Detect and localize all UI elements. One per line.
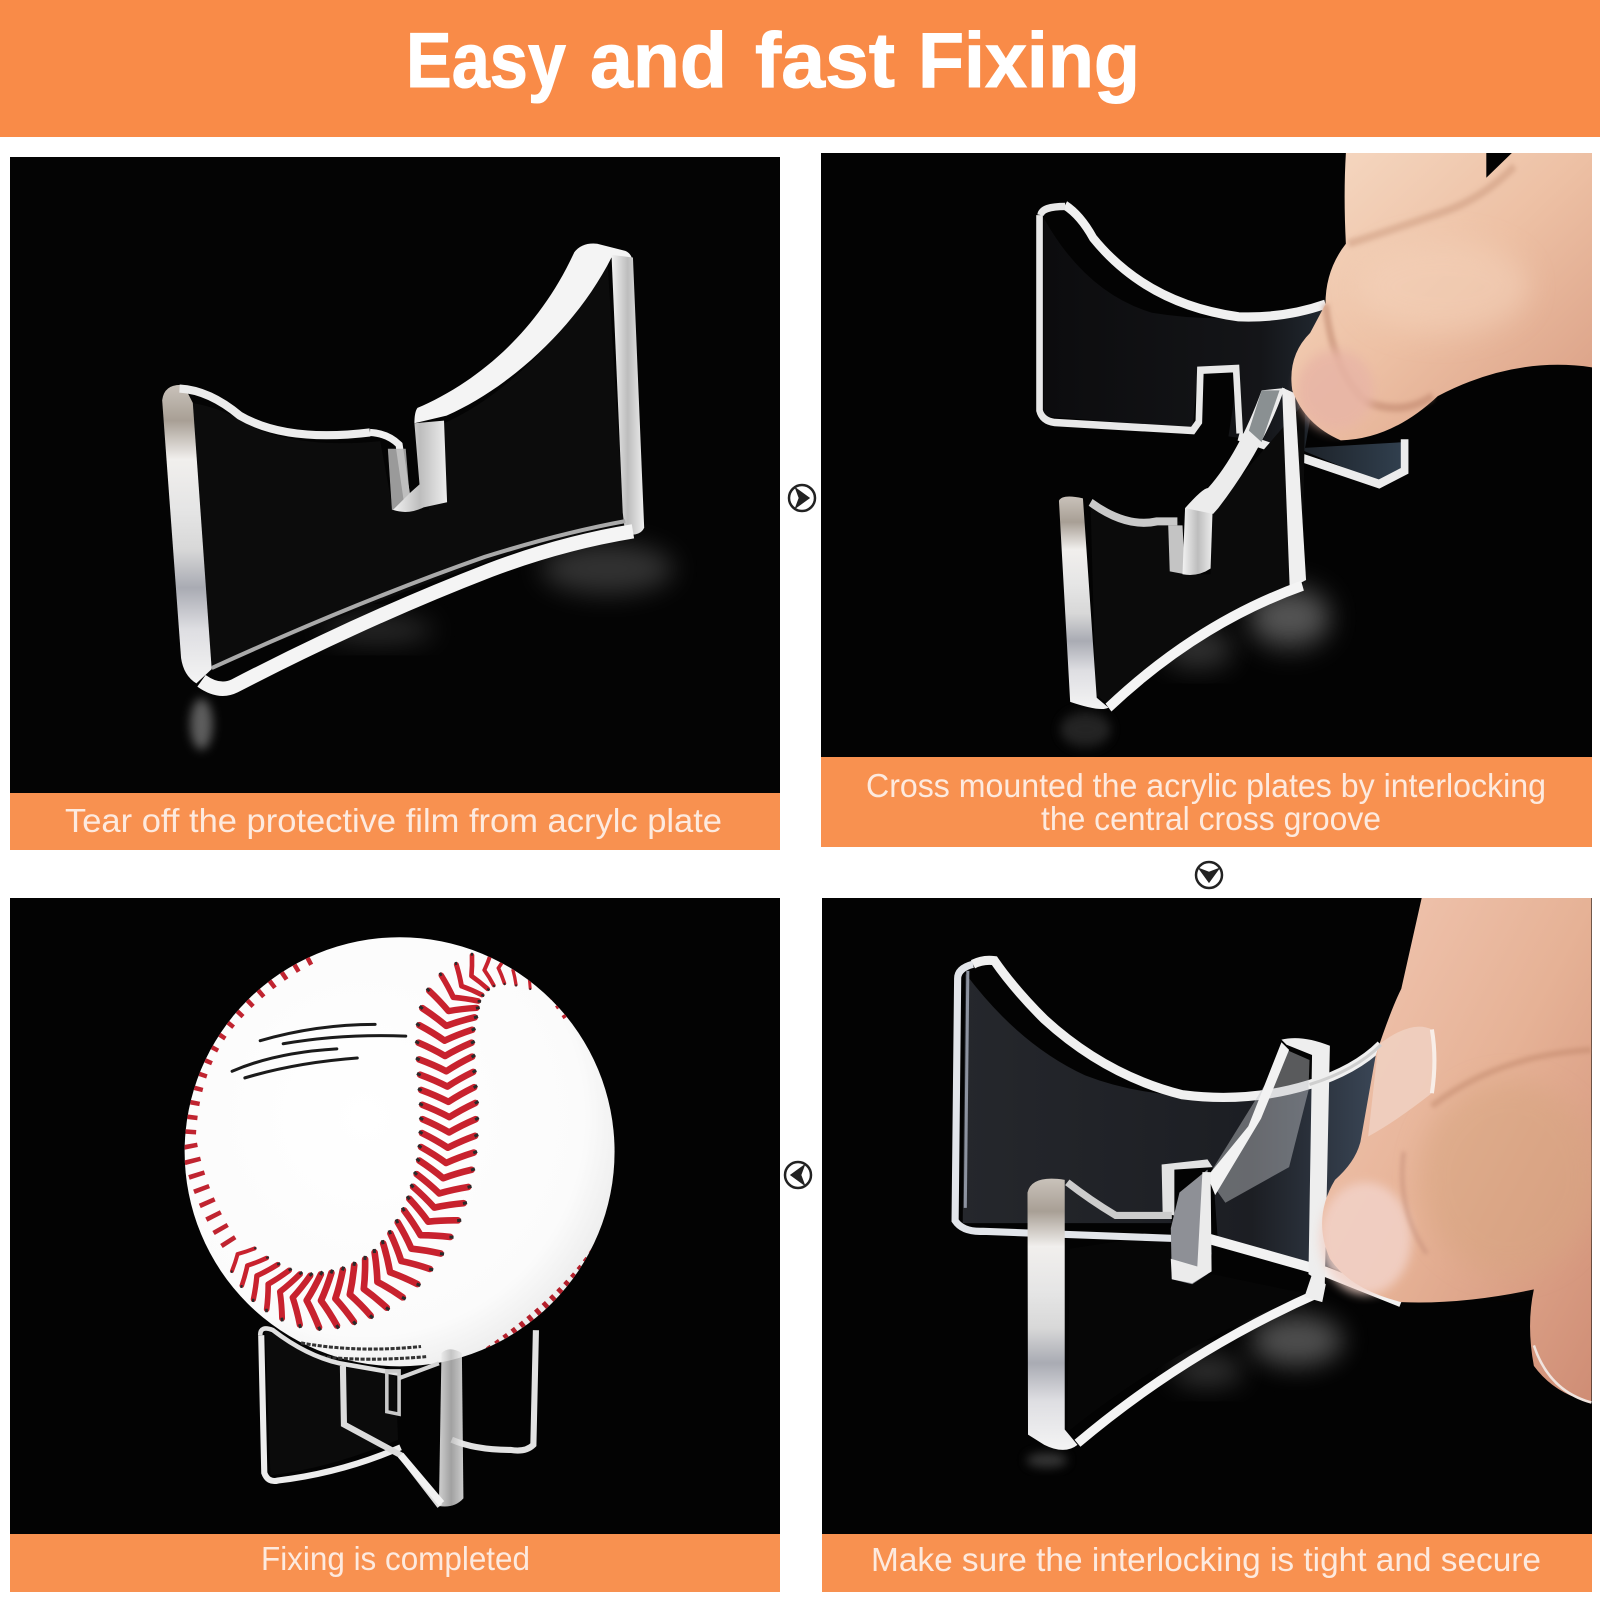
ball logo strokes xyxy=(232,1024,406,1078)
photo: two plates held by hand xyxy=(821,153,1592,757)
caption: step 1 xyxy=(10,793,780,850)
arrow: step 2 to step 3 xyxy=(1196,862,1222,888)
caption: step 2: Cross mounted the acrylic plates by interlocking xyxy=(866,767,1546,804)
acrylic stand xyxy=(260,1328,536,1506)
panel: step 2 cross mount xyxy=(821,153,1592,847)
arrow: step 1 to step 2 xyxy=(789,485,815,511)
title xyxy=(406,16,1140,104)
title: Easy xyxy=(406,16,566,104)
panel: step 1 tear off film xyxy=(10,157,780,850)
photo: interlocked plates close-up xyxy=(822,898,1592,1534)
panel: step 4 fixing completed xyxy=(10,898,780,1592)
photo: baseball on stand xyxy=(10,898,780,1534)
caption: step 1: Tear off the protective film from acrylc plate xyxy=(65,802,722,839)
caption: step 3: Make sure the interlocking is tight and secure xyxy=(871,1541,1541,1578)
ball printed text xyxy=(301,1343,426,1359)
hand xyxy=(1291,153,1592,440)
caption: step 3 xyxy=(822,1534,1592,1592)
title: Fixing xyxy=(918,16,1140,104)
hand xyxy=(1320,898,1598,1403)
caption: step 2: the central cross groove xyxy=(1041,800,1381,837)
photo: single acrylic plate xyxy=(10,157,780,793)
arrow: step 3 to step 4 xyxy=(785,1162,811,1188)
title: fast xyxy=(755,16,895,104)
header banner xyxy=(0,0,1600,137)
title: and xyxy=(590,16,727,104)
caption: step 4: Fixing is completed xyxy=(261,1540,530,1577)
caption: step 4 xyxy=(10,1534,780,1592)
caption: step 2 xyxy=(821,757,1592,847)
baseball xyxy=(185,937,615,1366)
panel: step 3 tight interlock xyxy=(822,898,1598,1592)
